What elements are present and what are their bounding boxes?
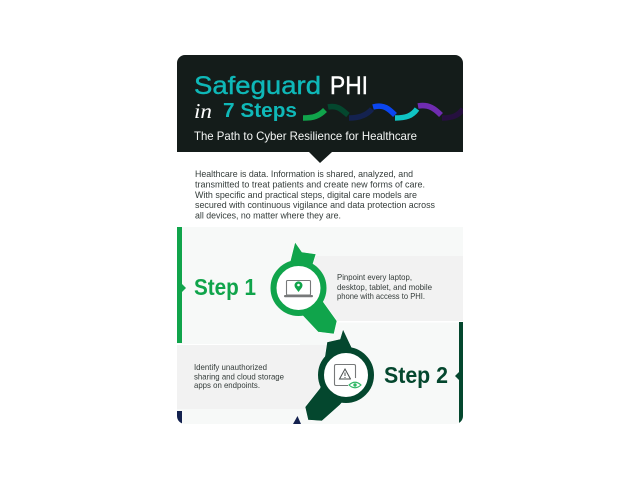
title: 7 Steps: 7 Steps: [223, 100, 297, 122]
step 2 circle: [321, 350, 371, 400]
step 1 description background: [312, 256, 463, 321]
panel: step 2 background: [177, 322, 463, 424]
step 2 text: sharing and cloud storage: [194, 372, 284, 382]
step 2 text: apps on endpoints.: [194, 381, 260, 390]
panel: step 3 partial: [177, 411, 302, 424]
intro text: all devices, no matter where they are.: [195, 210, 341, 220]
intro text: Healthcare is data. Information is shared, analyzed, and: [195, 168, 413, 179]
panel: header: [177, 55, 463, 163]
panel: step 2 content: [194, 329, 448, 421]
wave ribbon: [303, 106, 463, 118]
step 1 text: desktop, tablet, and mobile: [337, 283, 432, 292]
step 2 heading: Step 2: [384, 362, 448, 388]
title word: PHI: PHI: [330, 72, 368, 100]
step 1 text: [337, 273, 432, 301]
subtitle: The Path to Cyber Resilience for Healthcare: [194, 129, 417, 143]
intro text: [195, 168, 435, 220]
step 3 badge tip: [293, 416, 301, 424]
step 2 description background: [177, 345, 327, 409]
intro text: transmitted to treat patients and create new forms of care.: [195, 178, 425, 190]
step 2 text: Identify unauthorized: [194, 363, 267, 372]
title word: in: in: [194, 99, 212, 123]
step 1 badge shape: [290, 242, 337, 334]
step 1 side bar: [177, 227, 186, 343]
icon: warning with eye: [334, 364, 362, 392]
step 2 badge shape: [305, 330, 352, 421]
step 1 circle: [274, 263, 324, 313]
step 2 side bar: [455, 322, 463, 424]
title: Safeguard: Safeguard: [194, 72, 321, 100]
step 1 text: Pinpoint every laptop,: [337, 273, 412, 282]
intro text: secured with continuous vigilance and data protection across: [195, 199, 435, 210]
step 2 text: [194, 363, 284, 390]
step 3 side bar: [177, 411, 182, 424]
step 1 heading: Step 1: [194, 274, 256, 300]
step 1 lower background: [177, 321, 317, 344]
icon: laptop with location pin: [284, 280, 313, 297]
step 1 text: phone with access to PHI.: [337, 292, 425, 301]
intro text: With specific and practical steps, digital care models are: [195, 189, 417, 200]
infographic: [177, 55, 463, 424]
panel: step 1: [177, 227, 463, 344]
